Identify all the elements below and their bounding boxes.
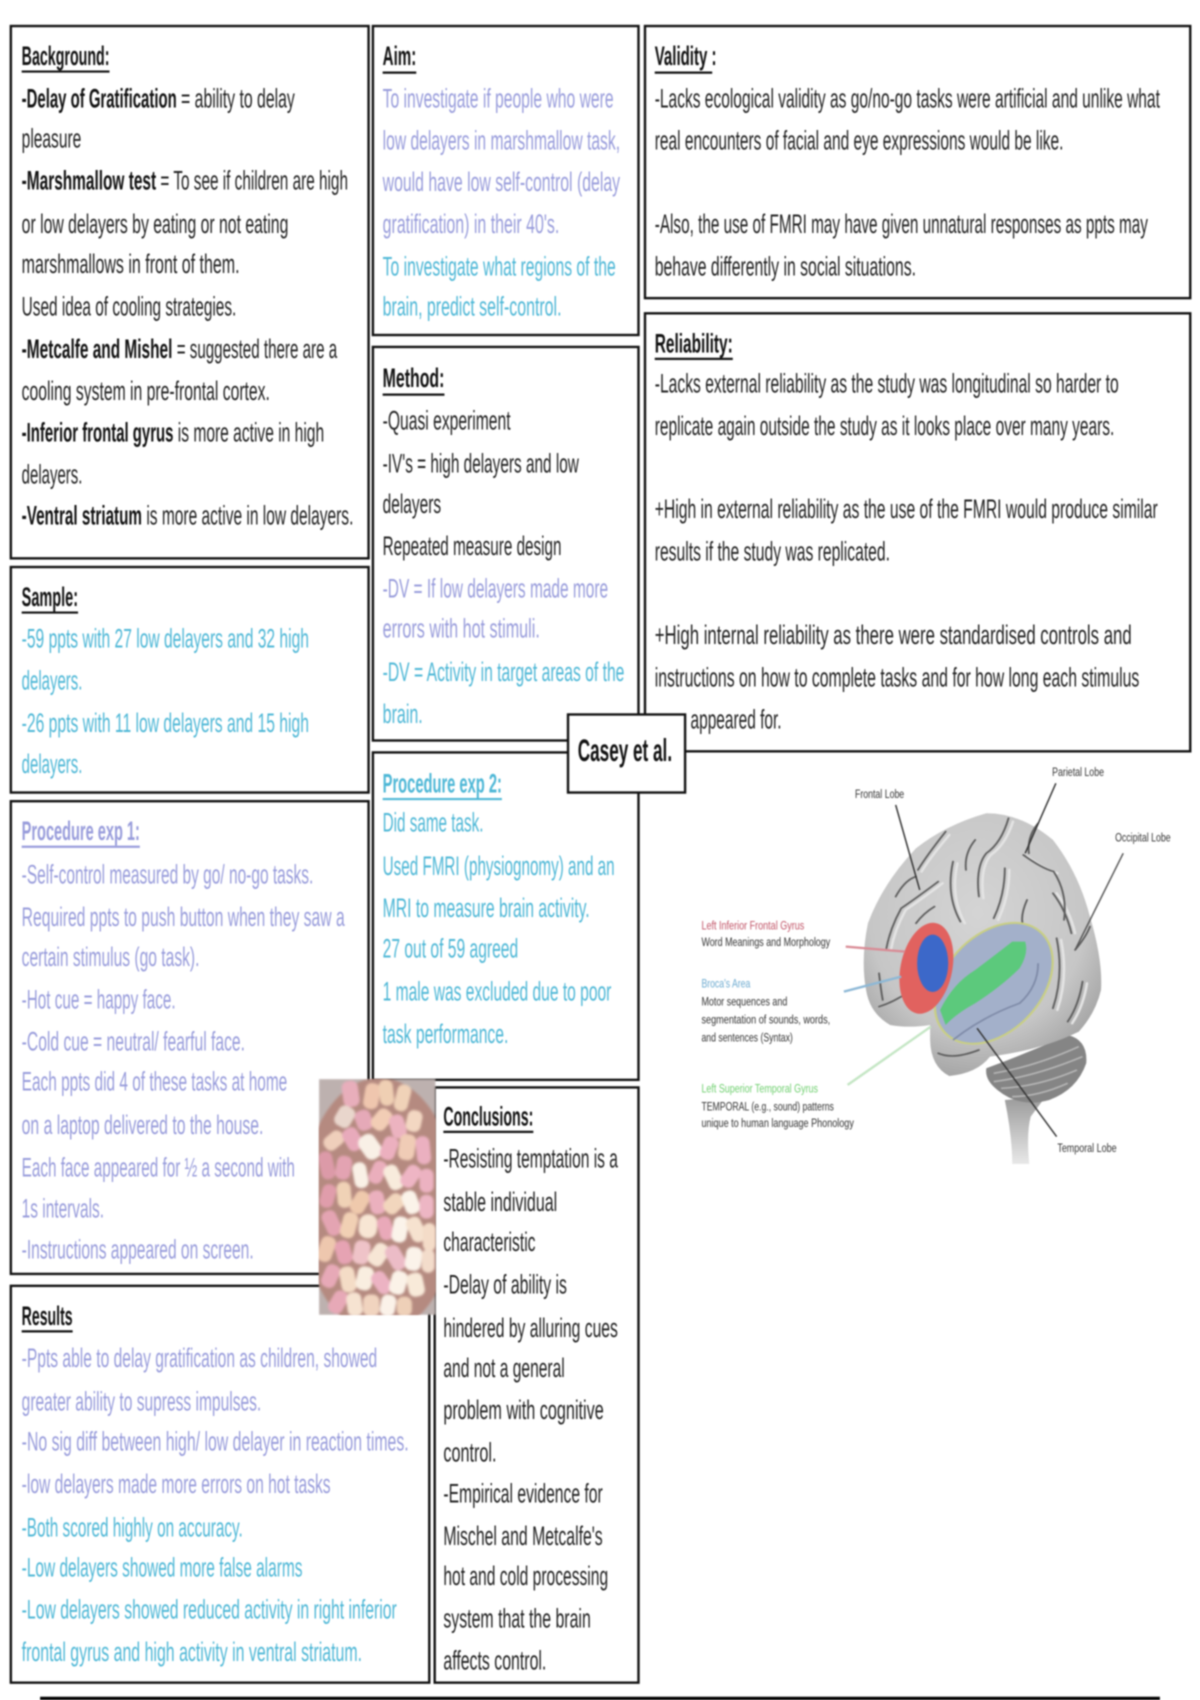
panel: method	[373, 347, 638, 740]
panel: aim	[373, 26, 638, 335]
heading: sample: Sample:	[22, 581, 78, 612]
language area labels: Motor sequences and	[701, 995, 787, 1008]
heading: results: Results	[22, 1300, 73, 1331]
language area labels: Left Inferior Frontal Gyrus	[701, 919, 804, 932]
language area labels: Word Meanings and Morphology	[701, 936, 831, 949]
text: procedure exp 2 content	[383, 807, 615, 1049]
text: background content: or low delayers by eating or not eating	[22, 208, 288, 239]
text: background content: -Metcalfe and Mishel	[22, 333, 172, 364]
lobe labels: Parietal Lobe	[1052, 765, 1104, 779]
language area labels: Broca's Area	[701, 977, 751, 990]
text: conclusions content: characteristic	[443, 1226, 536, 1257]
text: background content: -Inferior frontal gyrus	[22, 416, 173, 447]
footer rule	[40, 1697, 1160, 1700]
text: conclusions content: -Empirical evidence for	[443, 1478, 603, 1509]
text: procedure exp 1 content: -Cold cue = neutral/ fearful face.	[22, 1026, 245, 1057]
text: procedure exp 1 content: Each ppts did 4 of these tasks at home	[22, 1066, 287, 1097]
text: procedure exp 1 content: on a laptop delivered to the house.	[22, 1109, 263, 1140]
text: results content: -No sig diff between high/ low delayer in reaction times.	[22, 1426, 409, 1457]
brain artwork	[864, 813, 1101, 1164]
text: conclusions content: hot and cold processing	[443, 1560, 608, 1591]
text: background content: = ability to delay	[181, 82, 295, 113]
heading: procedure exp 1: Procedure exp 1:	[22, 815, 140, 846]
panel: validity	[645, 26, 1190, 298]
text: conclusions content: control.	[443, 1436, 496, 1467]
heading: procedure exp 2	[383, 768, 502, 799]
heading: aim	[383, 40, 416, 73]
title box: Casey et al.	[568, 714, 685, 793]
text: conclusions content: hindered by alluring cues	[443, 1312, 618, 1343]
heading: reliability: Reliability:	[655, 327, 733, 358]
panel: sample	[11, 567, 369, 793]
lobe labels: Temporal Lobe	[1057, 1142, 1117, 1155]
text: background content: Used idea of cooling strategies.	[22, 290, 236, 321]
heading: reliability	[655, 327, 733, 359]
heading: background: Background:	[22, 40, 109, 71]
text: conclusions content: -Delay of ability is	[443, 1268, 567, 1299]
text: procedure exp 2 content: 1 male was excluded due to poor	[383, 976, 611, 1007]
text: validity content: behave differently in social situations.	[655, 250, 916, 281]
panel: background	[11, 26, 369, 558]
text: aim content: To investigate what regions of the	[383, 250, 616, 281]
heading: method: Method:	[383, 362, 444, 393]
text: aim content: low delayers in marshmallow task,	[383, 125, 620, 156]
heading: background	[22, 40, 109, 72]
text: results content	[22, 1342, 409, 1667]
text: conclusions content: problem with cognitive	[443, 1394, 604, 1425]
panel: reliability	[645, 313, 1190, 751]
text: procedure exp 1 content: -Self-control measured by go/ no-go tasks.	[22, 859, 313, 890]
text: reliability content: appeared for.	[691, 704, 782, 735]
lobe labels	[855, 765, 1171, 1155]
text: results content: -Low delayers showed reduced activity in right inferior	[22, 1594, 397, 1625]
language area labels: segmentation of sounds, words,	[701, 1013, 830, 1026]
text: method content: Repeated measure design	[383, 530, 562, 561]
text: sample content: delayers.	[22, 748, 82, 779]
panel: procedure exp 2	[373, 752, 638, 1080]
text: procedure exp 1 content: Required ppts to push button when they saw a	[22, 901, 345, 932]
text: background content: delayers.	[22, 459, 82, 490]
heading: procedure exp 2: Procedure exp 2:	[383, 768, 502, 799]
text: conclusions content: -Resisting temptation is a	[443, 1143, 618, 1174]
text: procedure exp 1 content: certain stimulus (go task).	[22, 941, 199, 972]
text: procedure exp 2 content: 27 out of 59 agreed	[383, 932, 518, 963]
language area labels	[701, 919, 854, 1130]
text: background content: = To see if children are high	[160, 165, 348, 196]
text: results content: -low delayers made more errors on hot tasks	[22, 1468, 331, 1499]
title box: Casey et al.: Casey et al.	[578, 733, 672, 768]
text: background content: is more active in low delayers.	[146, 500, 353, 531]
text: conclusions content: Mischel and Metcalfe's	[443, 1520, 603, 1551]
text: method content: delayers	[383, 488, 441, 519]
text: background content	[22, 82, 353, 531]
heading: method	[383, 362, 444, 395]
image: marshmallows	[318, 1078, 437, 1316]
text: aim content: would have low self-control (delay	[382, 166, 620, 197]
text: background content: is more active in high	[178, 416, 324, 447]
text: aim content: To investigate if people who were	[383, 82, 614, 113]
text: background content: = suggested there are a	[177, 333, 338, 364]
lobe labels: Occipital Lobe	[1115, 831, 1171, 844]
text: reliability content	[655, 367, 1158, 735]
text: procedure exp 2 content: MRI to measure brain activity.	[383, 892, 590, 923]
text: sample content: delayers.	[22, 665, 82, 696]
text: method content: brain.	[383, 698, 423, 729]
text: method content: -DV = Activity in target areas of the	[383, 656, 624, 687]
text: method content	[383, 404, 624, 729]
text: procedure exp 1 content: Each face appeared for ½ a second with	[22, 1151, 295, 1182]
heading: aim: Aim:	[383, 40, 416, 71]
text: procedure exp 2 content: Did same task.	[383, 807, 483, 838]
language area labels: Left Superior Temporal Gyrus	[701, 1082, 818, 1095]
text: sample content: -59 ppts with 27 low delayers and 32 high	[22, 622, 309, 653]
text: method content: errors with hot stimuli.	[383, 612, 540, 644]
text: results content: -Ppts able to delay gratification as children, showed	[22, 1342, 377, 1373]
text: results content: greater ability to supress impulses.	[22, 1386, 261, 1417]
text: results content: -Both scored highly on accuracy.	[22, 1511, 243, 1542]
text: reliability content: results if the study was replicated.	[655, 536, 890, 567]
text: background content: marshmallows in front of them.	[22, 248, 240, 279]
text: background content: -Ventral striatum	[22, 500, 142, 531]
panel: procedure exp 1	[11, 801, 369, 1274]
language area labels: TEMPORAL (e.g., sound) patterns	[701, 1100, 834, 1113]
text: conclusions content: system that the brain	[443, 1602, 591, 1633]
text: background content: pleasure	[22, 122, 81, 153]
text: procedure exp 1 content	[22, 859, 345, 1265]
text: validity content	[655, 82, 1160, 281]
text: background content: -Marshmallow test	[22, 165, 156, 196]
language area labels: and sentences (Syntax)	[701, 1031, 793, 1044]
text: conclusions content: and not a general	[443, 1352, 565, 1383]
heading: sample	[22, 581, 78, 613]
text: conclusions content: affects control.	[443, 1645, 546, 1676]
text: results content: frontal gyrus and high activity in ventral striatum.	[22, 1636, 362, 1667]
text: conclusions content	[443, 1143, 618, 1676]
text: method content: -Quasi experiment	[383, 404, 511, 435]
text: procedure exp 1 content: 1s intervals.	[22, 1193, 104, 1224]
text: background content: -Delay of Gratification	[22, 82, 177, 113]
language area labels: unique to human language Phonology	[701, 1117, 854, 1130]
text: aim content: gratification) in their 40's.	[383, 208, 559, 239]
pointer lines	[844, 783, 1123, 1137]
lobe labels: Frontal Lobe	[855, 788, 904, 801]
panel: conclusions	[435, 1087, 638, 1683]
text: aim content	[382, 82, 620, 321]
text: results content: -Low delayers showed more false alarms	[22, 1551, 302, 1582]
text: sample content	[22, 622, 309, 779]
text: procedure exp 2 content: task performance.	[383, 1018, 508, 1049]
heading: validity	[655, 40, 717, 73]
text: procedure exp 1 content: -Hot cue = happy face.	[22, 983, 176, 1014]
text: procedure exp 2 content: Used FMRI (physiognomy) and an	[383, 850, 615, 881]
heading: conclusions	[443, 1100, 533, 1132]
text: method content: -DV = If low delayers made more	[383, 572, 608, 603]
heading: validity: Validity :	[655, 40, 717, 71]
panel: results	[11, 1286, 429, 1683]
text: background content: cooling system in pre-frontal cortex.	[22, 375, 270, 406]
text: aim content: brain, predict self-control.	[383, 290, 562, 321]
text: conclusions content: stable individual	[443, 1186, 557, 1217]
text: method content: -IV's = high delayers and low	[383, 448, 579, 479]
heading: procedure exp 1	[22, 815, 140, 847]
text: sample content: -26 ppts with 11 low delayers and 15 high	[22, 707, 309, 738]
heading: results	[22, 1300, 73, 1331]
text: procedure exp 1 content: -Instructions appeared on screen.	[22, 1234, 254, 1265]
heading: conclusions: Conclusions:	[443, 1100, 533, 1131]
diagram: brain	[701, 765, 1171, 1164]
